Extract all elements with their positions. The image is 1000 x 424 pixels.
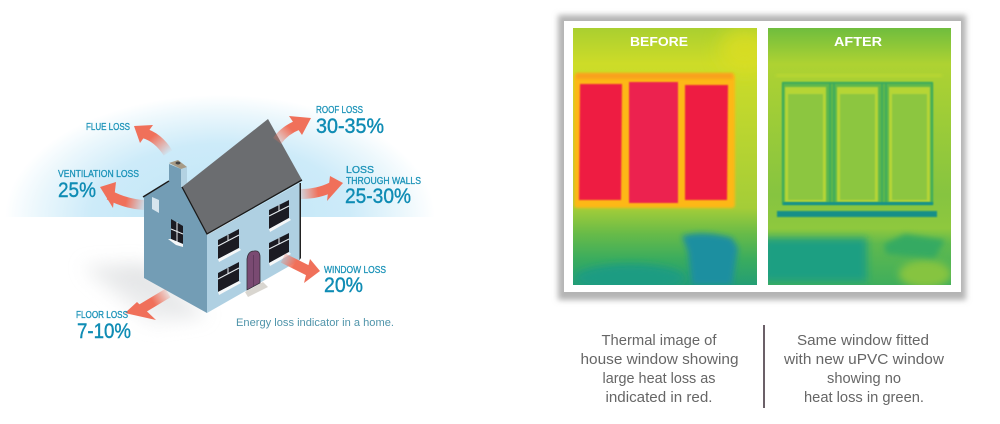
label: ventilation loss bbox=[58, 169, 139, 202]
panel: home energy loss diagram bbox=[18, 102, 422, 338]
caption: after: with new uPVC window bbox=[783, 352, 945, 368]
lintel band bbox=[777, 74, 941, 76]
ground shadow bbox=[82, 264, 207, 324]
arrow: walls loss bbox=[301, 176, 343, 201]
frame outline bbox=[783, 83, 932, 204]
label: roof loss bbox=[316, 105, 384, 138]
roof bbox=[182, 119, 302, 234]
heat halo around window bbox=[574, 74, 735, 208]
arrow: ventilation loss bbox=[100, 182, 144, 208]
side window bbox=[168, 219, 183, 247]
chimney bbox=[169, 160, 187, 187]
foliage bbox=[884, 234, 945, 258]
window sill bbox=[777, 211, 937, 217]
upper left window bbox=[218, 229, 241, 262]
photo frame bbox=[564, 21, 961, 292]
caption: after: showing no bbox=[827, 371, 901, 387]
lower left window bbox=[218, 262, 241, 295]
house right wall bbox=[207, 183, 300, 313]
caption: before: large heat loss as bbox=[602, 371, 716, 387]
diagram caption: Energy loss indicator in a home. bbox=[236, 317, 394, 329]
thermal image: before bbox=[573, 28, 771, 292]
caption: before: house window showing bbox=[580, 352, 738, 368]
caption: before: indicated in red. bbox=[606, 390, 712, 406]
panel: thermal image comparison bbox=[558, 15, 966, 408]
frame bottom bbox=[783, 202, 933, 205]
caption: before: Thermal image of bbox=[602, 333, 717, 349]
label: roof loss: ROOF LOSS bbox=[316, 105, 363, 116]
cold area bottom left bbox=[576, 260, 686, 285]
warm top right bbox=[717, 28, 757, 67]
label: flue loss: FLUE LOSS bbox=[86, 122, 130, 133]
arrow: floor loss bbox=[125, 293, 168, 320]
caption: after: Same window fitted bbox=[797, 333, 929, 349]
door bbox=[247, 251, 260, 290]
caption divider bbox=[763, 325, 765, 408]
upper right window bbox=[269, 200, 291, 232]
background glow bbox=[18, 102, 422, 217]
before label: BEFORE bbox=[630, 35, 688, 49]
label: window loss: WINDOW LOSS bbox=[324, 265, 386, 276]
label: loss through walls bbox=[345, 165, 421, 208]
warm lower right bbox=[899, 260, 951, 288]
label: loss through walls: LOSS bbox=[346, 165, 374, 176]
caption: after bbox=[783, 333, 945, 406]
label: window loss bbox=[324, 265, 386, 297]
house left wall bbox=[144, 182, 207, 313]
label: loss through walls: THROUGH WALLS bbox=[346, 176, 421, 187]
lower right window bbox=[269, 233, 291, 266]
door step bbox=[245, 282, 268, 297]
red pane left bbox=[579, 84, 622, 200]
label: loss through walls: 25-30% bbox=[345, 185, 411, 208]
thermal image: after bbox=[762, 28, 951, 288]
label: floor loss: FLOOR LOSS bbox=[76, 310, 128, 321]
cold area lower left bbox=[762, 238, 867, 282]
pane centre bbox=[837, 87, 878, 202]
caption: after: heat loss in green. bbox=[804, 390, 924, 406]
label: floor loss bbox=[76, 310, 131, 343]
cold blob bbox=[682, 233, 738, 285]
photo frame shadow bbox=[558, 15, 966, 300]
wall vent bbox=[152, 197, 159, 213]
window frame bbox=[782, 82, 933, 205]
caption: before bbox=[580, 333, 738, 406]
pane left bbox=[785, 87, 826, 202]
after label: AFTER bbox=[834, 35, 882, 49]
red pane right bbox=[685, 85, 728, 200]
arrow: window loss bbox=[283, 258, 320, 283]
label: ventilation loss: 25% bbox=[58, 179, 96, 202]
label: floor loss: 7-10% bbox=[77, 320, 131, 343]
illustration: house bbox=[143, 119, 302, 313]
label: ventilation loss: VENTILATION LOSS bbox=[58, 169, 139, 180]
pane right bbox=[889, 87, 930, 202]
label: window loss: 20% bbox=[324, 274, 363, 297]
arrow: flue loss bbox=[134, 125, 168, 153]
arrow: roof loss bbox=[277, 116, 311, 141]
red pane centre bbox=[629, 82, 678, 203]
label: roof loss: 30-35% bbox=[316, 115, 384, 138]
